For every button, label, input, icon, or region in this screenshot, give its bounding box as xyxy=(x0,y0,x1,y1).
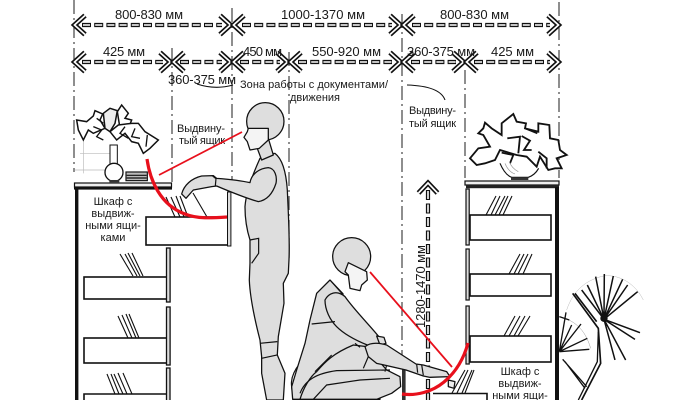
head xyxy=(247,103,284,140)
left cabinet xyxy=(74,183,231,400)
height label: 1280-1470 мм xyxy=(413,245,428,328)
dimension labels: 800-830 мм xyxy=(440,7,509,22)
vertical reference lines xyxy=(74,0,559,356)
dimension labels: 425 мм xyxy=(103,44,145,59)
back leg xyxy=(291,363,300,400)
leader curves xyxy=(197,84,445,100)
arm xyxy=(182,168,276,202)
drawer 1, right xyxy=(466,189,551,245)
face xyxy=(244,128,268,150)
label: left cabinet xyxy=(85,196,141,244)
label: left cabinet: ными ящи- xyxy=(85,220,141,232)
label: right cabinet: Шкаф с xyxy=(501,366,540,378)
far hand xyxy=(377,336,386,345)
closed drawer 2, left xyxy=(84,248,170,302)
vertical height dimension xyxy=(418,183,438,400)
zone caption xyxy=(240,79,389,104)
dimension labels: 450 мм xyxy=(243,44,282,59)
icon: right plant in bowl xyxy=(470,114,567,180)
dimension labels: 360-375 мм xyxy=(407,44,475,59)
right cabinet xyxy=(402,181,559,400)
label: right drawer xyxy=(409,105,456,130)
face xyxy=(345,263,367,291)
dimension labels: 360-375 мм xyxy=(168,72,236,87)
icon: fan plant xyxy=(559,274,643,400)
thigh and knee xyxy=(300,345,401,399)
label: right drawer: тый ящик xyxy=(409,118,456,130)
neck xyxy=(257,138,273,160)
zone caption: движения xyxy=(290,92,340,104)
closed drawer 3, left xyxy=(84,307,170,365)
dimension labels: 550-920 мм xyxy=(312,44,381,59)
dimension row: component widths xyxy=(74,52,558,72)
label: left drawer xyxy=(177,123,225,147)
dimension labels: 425 мм xyxy=(491,44,534,59)
head xyxy=(333,238,371,276)
label: right drawer: Выдвину- xyxy=(409,105,456,117)
upper arm xyxy=(325,293,387,347)
label: left cabinet: выдвиж- xyxy=(91,208,135,220)
label: right cabinet: выдвиж- xyxy=(498,378,542,390)
closed drawer 4, left xyxy=(84,368,170,400)
red sight line and reach arc: kneeling xyxy=(370,272,468,394)
label: right cabinet xyxy=(492,366,548,400)
dimension labels: 1000-1370 мм xyxy=(281,7,365,22)
forearm and hand xyxy=(365,343,450,377)
kneeling figure xyxy=(292,238,455,399)
standing figure xyxy=(182,103,300,400)
label: left drawer: Выдвину- xyxy=(177,123,225,135)
open drawer, right xyxy=(402,367,487,400)
dimension row: overall widths xyxy=(74,16,558,34)
red sight line and reach arc: standing xyxy=(147,132,242,218)
label: left cabinet: Шкаф с xyxy=(94,196,133,208)
dimension labels xyxy=(103,7,534,87)
icon: books xyxy=(126,172,147,181)
label: left drawer: тый ящик xyxy=(179,135,225,147)
dimension labels: 800-830 мм xyxy=(115,7,183,22)
zone caption: Зона работы с документами/ xyxy=(240,79,389,91)
body and front leg xyxy=(245,153,289,400)
icon: left plant with vase xyxy=(75,105,158,182)
torso xyxy=(292,280,380,399)
open drawer, left xyxy=(146,192,231,246)
drawer 2, right xyxy=(466,249,551,300)
drawer 3, right xyxy=(466,306,551,364)
label: left cabinet: ками xyxy=(101,232,125,244)
